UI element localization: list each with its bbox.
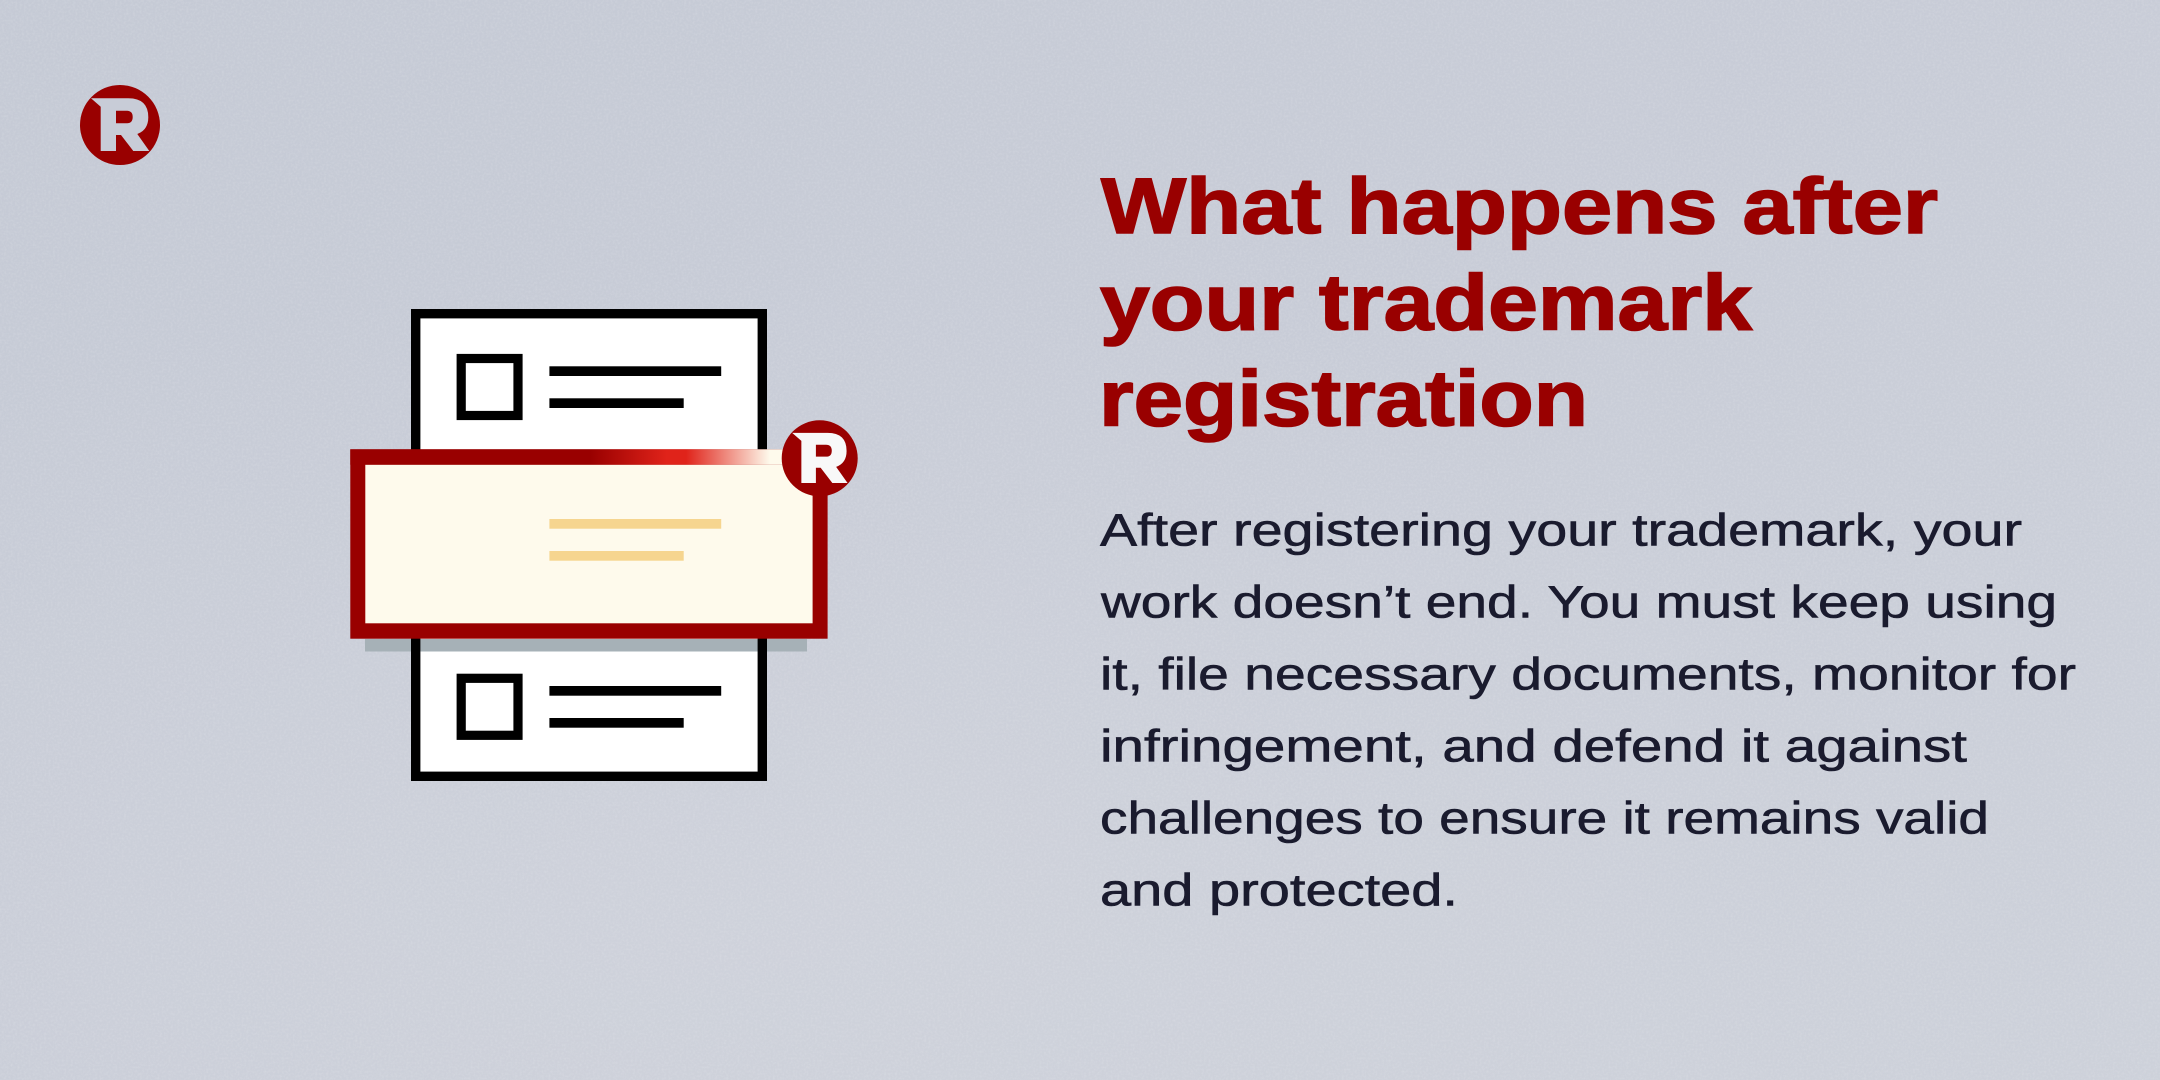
icon: registered badge [782,420,858,496]
highlighted row card [350,449,828,639]
title: What happens after [1101,161,1938,250]
drop shadow of highlighted row [365,639,807,652]
icon: brand logo [80,85,160,165]
body text [1100,504,2076,915]
body text: it, file necessary documents, monitor for [1100,648,2076,699]
bottom list row [461,678,721,735]
document sheet [365,309,807,781]
title: your trademark [1100,257,1753,346]
title: registration [1099,353,1588,442]
body text: infringement, and defend it against [1100,720,1967,771]
body text: challenges to ensure it remains valid [1100,792,1989,843]
title [1099,161,1938,442]
body text: and protected. [1100,864,1458,915]
top list row [461,358,721,416]
body text: work doesn’t end. You must keep using [1100,576,2057,627]
body text: After registering your trademark, your [1100,504,2022,555]
illustration: trademark document list [350,309,858,781]
